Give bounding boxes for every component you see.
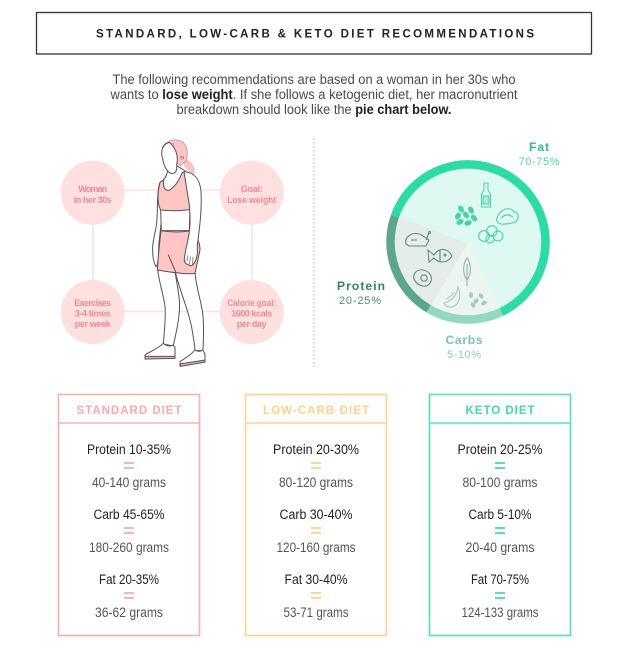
carb: 180-260 grams: [89, 540, 169, 555]
protein: 40-140 grams: [92, 475, 166, 490]
fat: 53-71 grams: [284, 605, 349, 620]
carb: [89, 507, 169, 555]
panel: keto diet: [429, 394, 571, 636]
circle: goal: [220, 161, 284, 225]
label: carbs: [446, 333, 483, 361]
slice: protein: [390, 216, 468, 310]
legs and shoes: [145, 270, 205, 366]
label: carbs: Carbs: [446, 333, 483, 347]
upper body: [153, 140, 201, 274]
intro text: wants to lose weight. If she follows a ketogenic diet, her macronutrient: [110, 87, 518, 102]
panel: woman profile: [61, 140, 284, 366]
heading: KETO DIET: [466, 405, 534, 417]
intro text: breakdown should look like the pie chart below.: [176, 102, 452, 117]
bra: [158, 172, 190, 211]
circle: calorie goal: Calorie goal:: [227, 298, 276, 308]
protein: 80-100 grams: [462, 475, 538, 490]
label: fat: Fat: [529, 140, 549, 154]
protein: Protein 10-35%: [87, 442, 171, 457]
fat: [95, 572, 163, 620]
slice: carbs: [429, 243, 501, 320]
icon: grains: [469, 292, 488, 309]
circle: calorie goal: per day: [237, 319, 267, 329]
slice: fat: [390, 164, 546, 320]
hair: [162, 140, 187, 166]
circle: woman in her 30s: Woman: [78, 184, 107, 194]
protein: [87, 442, 171, 490]
protein: [273, 442, 359, 490]
circle: calorie goal: [220, 280, 284, 344]
ear: [180, 156, 183, 159]
connector lines: [93, 190, 252, 312]
circle: exercises: Exercises: [74, 298, 111, 308]
fat: 36-62 grams: [95, 605, 163, 620]
label: fat: [518, 140, 560, 168]
carb: Carb 5-10%: [468, 507, 532, 522]
icon: cheese: [497, 209, 518, 224]
shorts crease: [168, 255, 176, 273]
protein: 80-120 grams: [279, 475, 353, 490]
icon: egg: [414, 270, 431, 286]
label: protein: 20-25%: [339, 295, 381, 307]
circle: exercises: 3-4 times: [75, 308, 111, 318]
carb: 120-160 grams: [276, 540, 356, 555]
fat: [284, 572, 349, 620]
divider: [313, 138, 315, 367]
intro text: [110, 72, 518, 117]
ring: fat: [395, 164, 546, 312]
label: protein: Protein: [337, 279, 385, 293]
fat: Fat 20-35%: [99, 572, 159, 587]
title box: STANDARD, LOW-CARB & KETO DIET RECOMMENDATIONS: [96, 28, 534, 40]
panel: standard diet: [58, 394, 200, 636]
heading: LOW-CARB DIET: [263, 405, 369, 417]
protein: [458, 442, 542, 490]
icon: nuts: [479, 226, 503, 243]
carb: 20-40 grams: [466, 540, 535, 555]
carb: [466, 507, 535, 555]
icon: banana: [444, 287, 460, 307]
circle: exercises: per week: [75, 319, 112, 329]
illustration: woman: [145, 140, 205, 366]
fat: Fat 30-40%: [284, 572, 348, 587]
left arm: [153, 184, 162, 267]
circle: calorie goal: 1600 kcals: [231, 308, 272, 318]
heading: STANDARD DIET: [76, 405, 182, 417]
right arm and hand: [184, 172, 201, 266]
label: carbs: 5-10%: [447, 349, 481, 361]
panel: low-carb diet: [245, 394, 387, 636]
label: fat: 70-75%: [518, 156, 560, 168]
icon: chicken: [406, 232, 430, 246]
torso: [158, 166, 190, 231]
carb: Carb 45-65%: [94, 507, 164, 522]
circle: goal: Lose weight: [227, 195, 276, 205]
ponytail: [184, 159, 194, 174]
circle: exercises: [61, 280, 125, 344]
label: protein: [337, 279, 385, 307]
shorts: [157, 231, 200, 274]
circle: goal: Goal:: [241, 184, 263, 194]
icon: fish: [428, 249, 452, 262]
fat: [462, 572, 539, 620]
icon: oil bottle: [482, 183, 490, 207]
fat: 124-133 grams: [462, 605, 539, 620]
carb: [276, 507, 356, 555]
circle: woman in her 30s: [61, 161, 125, 225]
carb: Carb 30-40%: [280, 507, 352, 522]
intro text: The following recommendations are based on a woman in her 30s who: [112, 72, 516, 87]
protein: Protein 20-30%: [273, 442, 359, 457]
fat: Fat 70-75%: [471, 572, 529, 587]
circle: woman in her 30s: in her 30s: [74, 195, 112, 205]
title box: [36, 12, 592, 54]
icon: seeds: [454, 204, 478, 227]
icon: leaf: [464, 258, 470, 286]
pie chart: [390, 164, 546, 320]
protein: Protein 20-25%: [458, 442, 542, 457]
face: [162, 142, 177, 174]
ring: protein: [391, 216, 429, 309]
ring: carbs: [429, 309, 501, 319]
